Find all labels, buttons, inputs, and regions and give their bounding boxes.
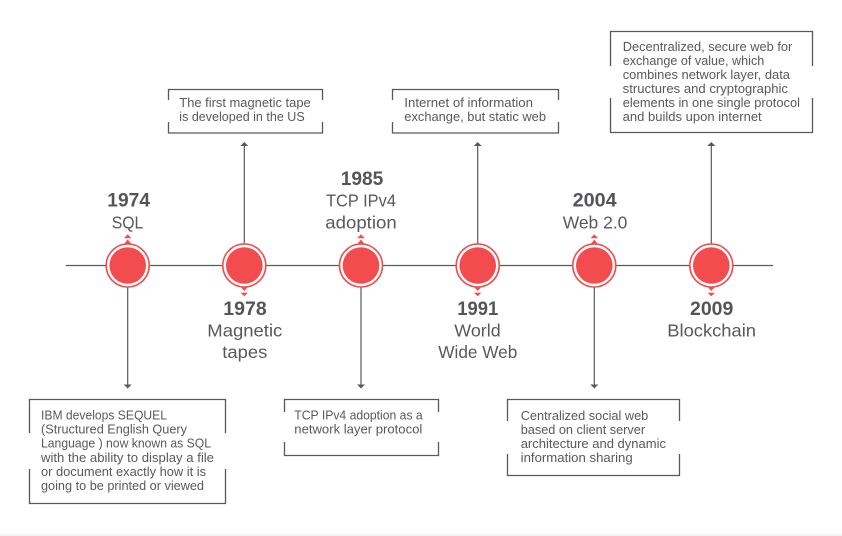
label 1978: tapes <box>222 342 268 362</box>
callout 2004: based on client server <box>521 422 646 437</box>
label 1985: adoption <box>325 212 397 232</box>
callout 1974: Language ) now known as SQL <box>41 436 211 451</box>
label 1978 <box>207 298 283 362</box>
milestone 1974 SQL <box>30 190 226 503</box>
callout 2009: exchange of value, which <box>623 53 764 68</box>
callout 1991: Internet of information <box>404 95 533 110</box>
label 1978: Magnetic <box>207 321 283 341</box>
label 2004 <box>563 189 628 232</box>
callout 2004: Centralized social web <box>521 408 648 423</box>
milestone 1991 World Wide Web <box>392 90 558 362</box>
label 1974: 1974 <box>107 190 150 212</box>
callout 1974: IBM develops SEQUEL <box>41 408 167 422</box>
milestone 1978 Magnetic tapes <box>168 90 322 362</box>
node 2009 <box>690 244 733 296</box>
label 2009: 2009 <box>690 298 733 320</box>
connector arrow: 2004 down <box>590 287 598 388</box>
callout 1991: exchange, but static web <box>404 109 546 124</box>
connector arrow: 2009 up <box>707 142 715 244</box>
callout 1974 <box>30 400 226 504</box>
node 2004 <box>573 234 616 287</box>
callout 1985: TCP IPv4 adoption as a <box>294 407 423 422</box>
label 2004: 2004 <box>573 189 617 211</box>
callout 1985 <box>284 400 438 456</box>
label 1974: SQL <box>112 212 144 232</box>
callout 2009 <box>610 32 812 132</box>
label 1991 <box>438 298 517 362</box>
milestone 2004 Web 2.0 <box>508 189 680 476</box>
connector arrow: 1991 up <box>474 142 482 244</box>
connector arrow: 1974 down <box>124 287 132 388</box>
label 1985 <box>325 168 397 232</box>
label 1985: TCP IPv4 <box>326 191 396 211</box>
label 1991: 1991 <box>457 298 498 320</box>
label 1991: Wide Web <box>438 342 517 362</box>
node 1978 <box>223 244 266 296</box>
callout 1978: is developed in the US <box>179 109 305 124</box>
timeline axis <box>66 264 773 266</box>
callout 1991 <box>392 90 558 133</box>
callout 2009: structures and cryptographic <box>623 81 788 96</box>
label 2009 <box>667 298 756 341</box>
callout 2004: information sharing <box>521 450 633 465</box>
node 1974 <box>106 234 149 287</box>
callout 2004: architecture and dynamic <box>521 436 666 451</box>
label 2009: Blockchain <box>667 321 756 341</box>
connector arrow: 1985 down <box>357 287 365 388</box>
callout 1978 <box>168 90 322 133</box>
label 1978: 1978 <box>223 298 267 320</box>
node 1985 <box>340 234 382 287</box>
label 1991: World <box>454 321 501 341</box>
callout 1978: The first magnetic tape <box>179 95 311 110</box>
callout 1974: or document exactly how it is <box>41 464 206 479</box>
callout 2009: and builds upon internet <box>623 109 762 124</box>
callout 1974: going to be printed or viewed <box>41 478 204 493</box>
callout 2004 <box>508 400 680 476</box>
callout 2009: elements in one single protocol <box>623 95 800 110</box>
callout 1985: network layer protocol <box>294 421 422 436</box>
label 1974 <box>107 190 150 232</box>
callout 1974: (Structured English Query <box>41 422 187 437</box>
connector arrow: 1978 up <box>240 142 248 244</box>
milestone 2009 Blockchain <box>610 32 812 341</box>
callout 2009: Decentralized, secure web for <box>623 39 793 54</box>
milestone 1985 TCP IPv4 adoption <box>284 168 438 456</box>
label 2004: Web 2.0 <box>563 212 628 232</box>
callout 2009: combines network layer, data <box>623 67 791 82</box>
label 1985: 1985 <box>341 168 383 190</box>
callout 1974: with the ability to display a file <box>40 450 214 465</box>
node 1991 <box>456 244 499 296</box>
